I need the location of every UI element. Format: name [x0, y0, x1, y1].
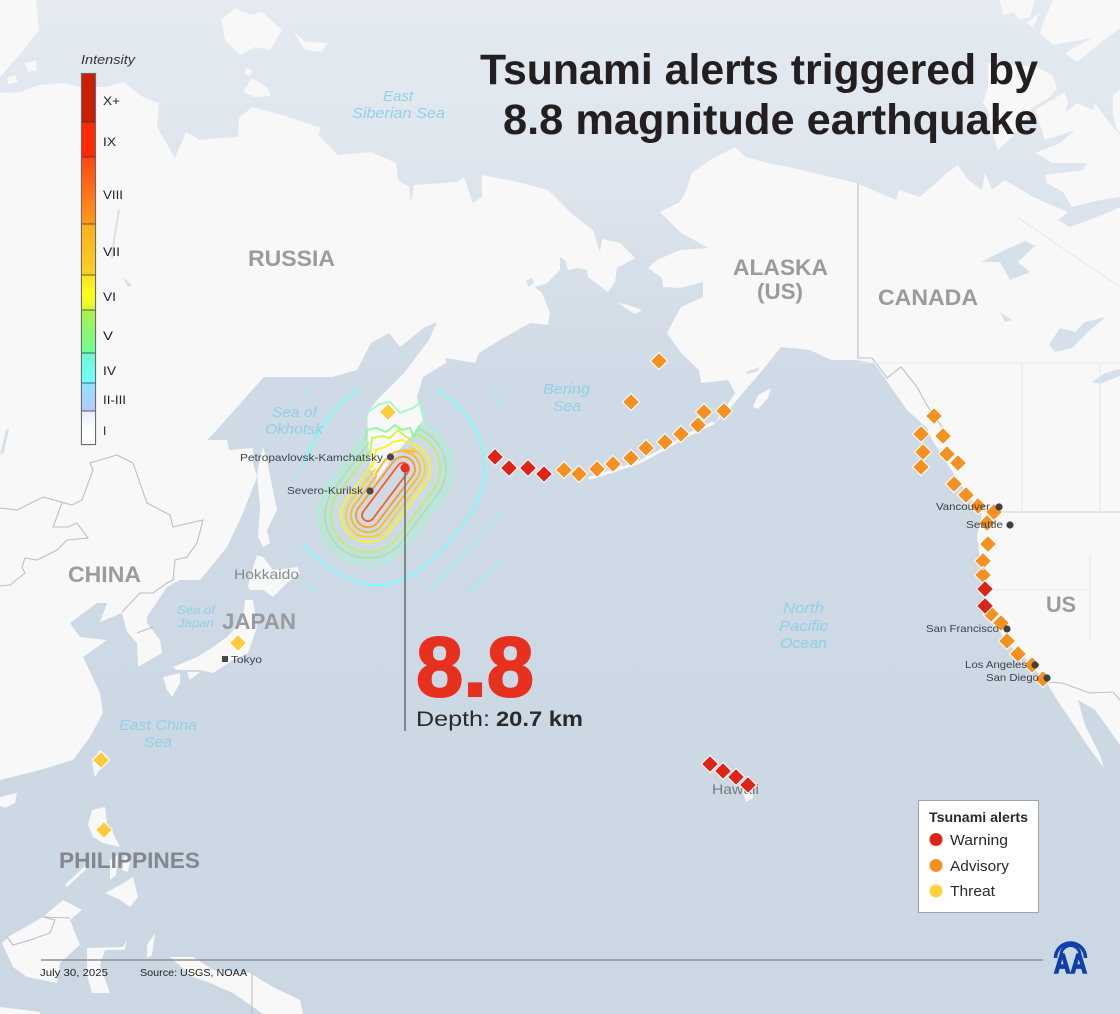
label: Hawaii: Hawaii — [712, 781, 759, 797]
border: Korea — [137, 627, 153, 633]
scale labels: VI — [103, 290, 116, 304]
depth text: Depth: — [416, 708, 490, 731]
shakemap intensity contours — [299, 390, 503, 593]
land: Canadian Arctic islands — [983, 0, 1120, 207]
land: Aleutian chain and Palawan — [67, 423, 713, 885]
country labels: PHILIPPINES — [59, 848, 200, 873]
legend: warning: Warning — [950, 833, 1008, 849]
land: Sakhalin — [257, 447, 277, 547]
threat markers — [92, 404, 396, 838]
scale labels: X+ — [103, 94, 120, 108]
lakes and rivers — [0, 210, 1120, 455]
city: San Francisco: San Francisco — [926, 623, 999, 635]
scale labels: I — [103, 424, 106, 438]
epicenter dot — [400, 464, 410, 472]
sea labels: Sea — [553, 399, 581, 415]
icon: AA logo: AA — [1054, 948, 1087, 979]
country labels: CHINA — [68, 562, 141, 587]
border: US-Canada — [990, 511, 1120, 513]
country labels: JAPAN — [222, 609, 296, 634]
legend: threat: Threat — [950, 884, 995, 900]
land: Arctic Russian islands — [0, 0, 327, 97]
land: Borneo, Sulawesi, New Guinea — [0, 900, 303, 1014]
sea labels: North — [783, 601, 824, 617]
scale labels: IV — [103, 364, 116, 378]
land: Taiwan, Hainan, Philippines — [0, 750, 138, 907]
sea labels: East China — [119, 718, 197, 734]
country labels: CANADA — [878, 285, 978, 310]
scale bar — [82, 74, 96, 444]
city: San Diego: San Diego — [986, 672, 1039, 684]
label: Hokkaido: Hokkaido — [234, 566, 299, 582]
city: Tokyo: Tokyo — [231, 654, 262, 666]
border: Alaska-Canada — [858, 183, 942, 427]
sea labels: Sea — [144, 735, 172, 751]
city: Petropavlovsk-Kamchatsky: Petropavlovsk-Kamchatsky — [240, 452, 384, 464]
provincial borders — [858, 217, 1120, 640]
sea labels: East — [383, 89, 414, 105]
magnitude callout — [416, 620, 583, 731]
sea labels: Sea of — [272, 405, 319, 421]
country labels — [59, 246, 1076, 873]
border: US-Mexico — [1047, 682, 1120, 700]
sea labels: Sea of — [177, 605, 217, 617]
border: Borneo — [7, 917, 70, 945]
city: Los Angeles: Los Angeles — [965, 659, 1027, 671]
country labels: RUSSIA — [248, 246, 335, 271]
city: Vancouver: Vancouver — [936, 501, 991, 513]
faint outer contour pieces — [303, 390, 503, 593]
scale heading: Intensity — [81, 52, 137, 67]
sea labels — [119, 89, 829, 751]
footer rule — [41, 959, 1043, 961]
scale labels: VII — [103, 245, 120, 259]
border: Mongolia-China — [0, 503, 88, 586]
footer date: July 30, 2025 — [40, 967, 108, 979]
intensity scale legend — [81, 52, 137, 444]
magnitude number: 8.8 — [416, 620, 534, 714]
title: 8.8 magnitude earthquake — [503, 96, 1038, 144]
country labels: ALASKA — [733, 255, 828, 280]
depth text: 20.7 km — [496, 708, 583, 731]
legend heading: Tsunami alerts — [929, 809, 1028, 825]
sea labels: Bering — [543, 382, 590, 398]
sea labels: Okhotsk — [265, 422, 324, 438]
scale labels: II-III — [103, 393, 126, 407]
land: Kodiak, St Lawrence, Hawaii — [619, 303, 771, 802]
sea labels: Siberian Sea — [352, 106, 445, 122]
land: Japan — [163, 555, 300, 697]
country labels: (US) — [757, 279, 803, 304]
epicenter leader line — [404, 468, 406, 731]
place labels — [222, 452, 1051, 684]
border: New Guinea — [251, 973, 253, 1014]
title: Tsunami alerts triggered by — [480, 46, 1038, 94]
contour rings — [318, 422, 453, 566]
footer source: Source: USGS, NOAA — [140, 967, 247, 979]
sea labels: Pacific — [779, 619, 829, 635]
outer cyan contour — [303, 390, 485, 585]
tsunami alerts legend — [918, 800, 1038, 912]
depth text — [416, 708, 583, 731]
scale labels — [103, 94, 126, 438]
advisory markers — [556, 352, 1052, 688]
scale labels: V — [103, 329, 113, 343]
legend box — [918, 800, 1038, 912]
scale labels: VIII — [103, 188, 123, 202]
sea labels: Japan — [177, 618, 214, 630]
city: Severo-Kurilsk: Severo-Kurilsk — [287, 485, 364, 497]
border: Russia-China and Korea — [0, 455, 203, 612]
city: Tokyo — [222, 654, 262, 666]
warning markers — [486, 448, 994, 794]
legend: advisory: Advisory — [950, 859, 1010, 875]
city: Seattle: Seattle — [966, 519, 1003, 531]
land: Russia and East Asia — [0, 82, 635, 780]
country labels: US — [1046, 592, 1076, 617]
jagged contours on Kamchatka — [365, 402, 424, 475]
land: Alaska and North America — [648, 147, 1120, 768]
city: Seattle — [966, 519, 1014, 531]
scale labels: IX — [103, 135, 116, 149]
sea labels: Ocean — [780, 636, 827, 652]
title — [480, 46, 1038, 144]
